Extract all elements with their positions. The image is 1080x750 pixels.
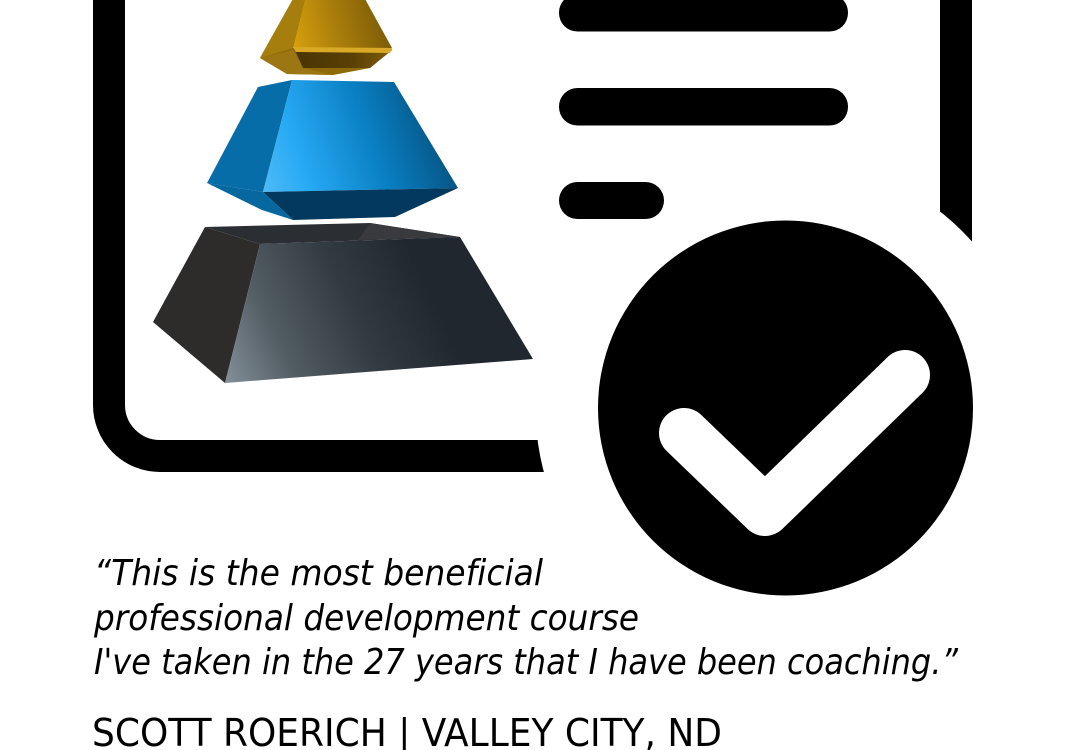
testimonial quote: [93, 553, 958, 683]
pyramid: gold top: [260, 0, 392, 75]
icon: text lines: [559, 0, 848, 219]
pyramid: black base: [153, 223, 533, 383]
icon: check badge: [598, 220, 973, 596]
icon: pyramid: [153, 0, 533, 383]
icon: document outline: [109, 0, 956, 456]
testimonial quote: I've taken in the 27 years that I have been coaching.”: [94, 642, 958, 683]
testimonial quote: “This is the most beneficial: [94, 553, 543, 594]
white gap around the badge: [536, 158, 1036, 658]
testimonial quote: professional development course: [93, 598, 639, 639]
pyramid: blue middle: [207, 80, 458, 220]
